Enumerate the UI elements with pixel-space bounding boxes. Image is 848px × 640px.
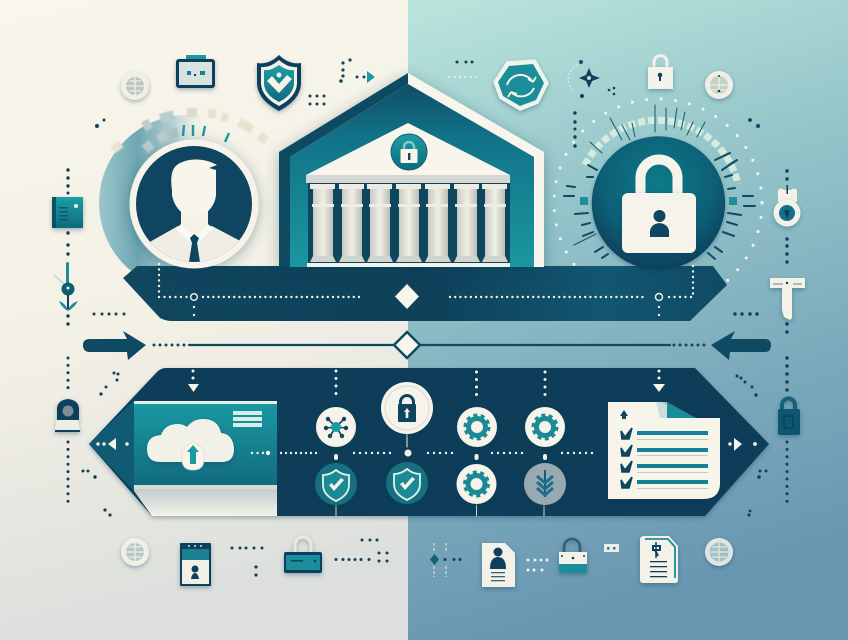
icon: teal padlock	[559, 539, 587, 573]
banner centre diamond	[395, 284, 419, 309]
icon: sync octagon	[494, 60, 548, 110]
background: left cream panel	[0, 0, 408, 640]
icon: teal arrow pin	[54, 262, 78, 311]
icon: globe top right	[705, 71, 733, 99]
neck	[181, 211, 208, 226]
node: wheat	[524, 463, 566, 505]
text lines	[637, 431, 708, 484]
icon: lock lower right	[778, 398, 800, 435]
collar	[176, 224, 213, 241]
upper banner	[123, 266, 727, 321]
vertical dots lower right	[786, 442, 788, 507]
divider left arrow	[83, 331, 146, 360]
icon: sparkle	[568, 60, 615, 98]
user avatar	[130, 140, 258, 270]
node: shield 2	[386, 462, 428, 504]
node: gear 1	[457, 407, 497, 447]
divider line with dots	[154, 344, 705, 346]
banner dotted path left	[159, 264, 362, 316]
shoulders	[150, 226, 239, 262]
house teal interior	[290, 84, 534, 267]
dark colonnade backing	[308, 183, 510, 263]
dots and arrow top left	[339, 58, 375, 83]
lock radial burst	[554, 99, 762, 307]
right tip arrow	[728, 438, 757, 451]
right column dots	[733, 169, 789, 392]
sloped dots lower left	[82, 372, 120, 517]
lock circle	[592, 136, 725, 270]
upload badge	[182, 441, 204, 470]
bank building	[279, 73, 544, 267]
floor	[307, 263, 510, 267]
house white outer frame	[279, 73, 544, 267]
entablature	[306, 175, 510, 183]
dots bottom centre	[334, 538, 388, 562]
columns	[310, 184, 508, 262]
house dark frame	[279, 73, 408, 267]
user crescent glow	[99, 108, 275, 291]
dots bottom right	[526, 558, 548, 572]
divider diamond	[394, 332, 420, 358]
small tag	[604, 544, 619, 552]
node: gear 3	[456, 464, 496, 504]
icon: phone	[180, 543, 211, 586]
connector dots grid	[252, 371, 598, 516]
node: padlock	[381, 382, 433, 434]
divider right arrow	[711, 331, 771, 360]
large padlock	[622, 160, 696, 253]
node: shield 1	[315, 463, 357, 505]
dots bottom left	[230, 546, 264, 577]
left tip arrow	[96, 438, 129, 450]
dot cluster	[308, 94, 326, 106]
icon: globe top left	[121, 72, 149, 100]
dots upper left	[95, 118, 106, 128]
icon: globe bottom right	[705, 538, 733, 566]
icon: receipt document	[640, 536, 678, 583]
diamond bottom centre	[430, 543, 462, 577]
icon: globe bottom left	[121, 538, 149, 566]
icon: T key	[770, 278, 805, 320]
pediment	[306, 123, 510, 175]
dots top centre	[449, 60, 482, 77]
folded corner	[667, 402, 696, 418]
banner dotted path right	[450, 262, 693, 316]
cloud	[147, 419, 234, 462]
lower banner	[89, 368, 769, 516]
node: gear 2	[525, 407, 565, 447]
vertical dots lower left	[66, 358, 70, 507]
icon: shield top	[257, 55, 301, 111]
checklist document	[608, 402, 720, 499]
cloud upload card	[134, 401, 277, 516]
background: right teal panel	[408, 0, 848, 640]
top arrow left	[188, 370, 199, 392]
bank lock badge	[391, 134, 427, 170]
menu lines	[233, 411, 262, 427]
icon: tablet	[176, 55, 215, 88]
icon: lock top right	[648, 56, 673, 89]
node: network	[316, 407, 356, 447]
icon: teal folder	[52, 197, 83, 228]
icon: person document	[482, 543, 515, 587]
lower banner teal tip	[89, 400, 134, 491]
vertical dots by lock	[573, 111, 760, 148]
small up arrow	[620, 410, 628, 419]
icon: key ring lock	[774, 185, 800, 226]
checks	[621, 428, 632, 488]
head	[171, 159, 217, 217]
top arrow right	[653, 370, 665, 392]
sloped dots lower right	[736, 374, 768, 517]
tie	[189, 234, 200, 262]
icon: lock lower left	[55, 399, 80, 432]
icon: lock box	[284, 537, 322, 573]
left column dots	[66, 168, 126, 326]
